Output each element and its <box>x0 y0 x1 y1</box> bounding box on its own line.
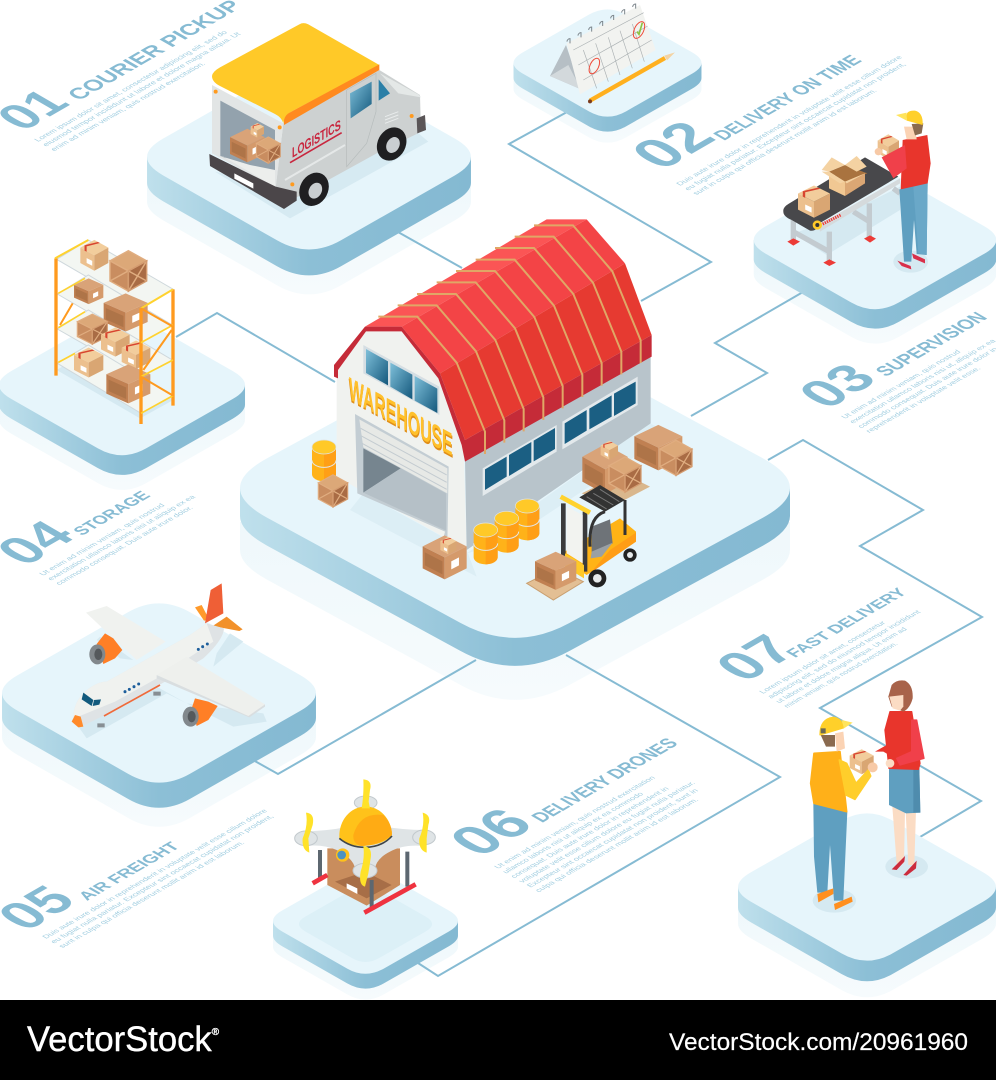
number 03: 03 <box>785 356 889 416</box>
roof <box>334 219 652 462</box>
paragraph: eu fugiat nulla pariatur. Excepteur sint occaecat cupidatat non proident, <box>48 813 276 945</box>
paragraph: Duis aute irure dolor in reprehenderit in voluptate velit esse cillum dolore <box>40 807 269 940</box>
platform <box>273 868 458 989</box>
paragraph: commodo consequat. Duis aute irure dolor in <box>855 346 996 429</box>
calendar <box>550 4 675 103</box>
footer logo: ® <box>212 1027 220 1038</box>
warehouse sign: WAREHOUSE <box>349 372 453 465</box>
paragraph: voluptate velit esse cillum dolore eu fugiat nulla pariatur. <box>516 780 697 884</box>
conveyor and worker <box>783 111 931 273</box>
paragraph: sunt in culpa qui officia deserunt mollit anim id est laborum. <box>56 839 247 949</box>
number 07: 07 <box>701 626 809 689</box>
crate by the door <box>318 475 348 507</box>
side windows left <box>483 425 557 496</box>
paragraph: ullamco laboris nisi ut aliquip ex ea commodo <box>500 791 646 875</box>
block 07 fast delivery <box>701 585 939 709</box>
paragraph: Lorem ipsum dolor sit amet, consectetur adipiscing elit, sed do <box>32 29 229 143</box>
logistics lettering: LOGISTICS <box>292 117 341 162</box>
paragraph: Excepteur sint occaecat cupidatat non proident, sunt in <box>524 787 700 889</box>
van <box>209 23 428 218</box>
heading: DELIVERY DRONES <box>527 735 683 826</box>
courier man <box>811 717 878 913</box>
paragraph: culpa qui officia deserunt mollit anim id est laborum. <box>533 796 701 894</box>
front wall <box>337 330 467 550</box>
paragraph: minim veniam, quis nostrud exercitation. <box>781 641 900 709</box>
pencil <box>588 52 675 103</box>
platform <box>514 9 701 132</box>
shelf rack <box>55 240 173 424</box>
rear wheel <box>293 167 334 211</box>
block 02 delivery on time <box>618 52 921 196</box>
paragraph: consequat. Duis aute irure dolor in reprehenderit in <box>508 785 671 879</box>
drone <box>295 779 435 913</box>
heading: AIR FREIGHT <box>74 839 185 903</box>
block 01 courier pickup <box>0 0 251 152</box>
fuselage <box>73 623 224 727</box>
side wall <box>465 357 651 550</box>
side windows right <box>562 377 638 449</box>
panel: courier pickup van <box>147 23 471 275</box>
crate with parcel <box>423 535 467 579</box>
platform <box>2 603 316 808</box>
panel: air freight plane <box>2 583 316 808</box>
near engine <box>183 698 218 727</box>
paragraph: exercitation ullamco laboris nisi ut aliquip ex ea <box>45 493 198 582</box>
panel: calendar <box>514 4 701 132</box>
paragraph: Ut enim ad minim veniam, quis nostrud exercitation <box>492 774 657 870</box>
central platform <box>240 338 790 666</box>
paragraph: Ut enim ad minim veniam, quis nostrud <box>839 348 963 420</box>
block 05 air freight <box>0 807 286 949</box>
platform <box>0 315 245 475</box>
warehouse building <box>334 219 670 577</box>
heading: DELIVERY ON TIME <box>709 52 867 144</box>
open carton <box>822 156 868 196</box>
panel: central warehouse <box>240 219 790 666</box>
forklift <box>527 485 637 600</box>
platform <box>147 65 471 275</box>
crate stack right <box>634 425 692 475</box>
paragraph <box>492 765 714 894</box>
plane <box>72 583 267 738</box>
upper windows <box>363 345 439 415</box>
block 06 delivery drones <box>436 735 714 894</box>
paragraph: eiusmod tempor incididunt ut labore et dolore magna aliqua. Ut <box>40 31 243 148</box>
crate stack on pallet <box>582 441 650 505</box>
panel: delivery drone <box>273 779 458 989</box>
panel: storage shelf <box>0 240 245 475</box>
connector lines <box>176 112 982 976</box>
paragraph: Lorem ipsum dolor sit amet, consectetur <box>757 619 888 695</box>
heading: FAST DELIVERY <box>782 585 912 660</box>
paragraph: Ut enim ad minim veniam, quis nostrud <box>37 502 167 577</box>
woman <box>875 680 928 879</box>
block 03 supervision <box>785 309 996 434</box>
warehouse sign front: WAREHOUSE <box>349 370 452 463</box>
footer bar <box>0 1000 996 1080</box>
worker <box>875 111 931 273</box>
platform <box>754 171 996 329</box>
paragraph: enim ad minim veniam, quis nostrud exercitation. <box>48 60 208 152</box>
paragraph: exercitation ullamco laboris nisi ut, aliquip ex ea <box>847 337 996 425</box>
heading: STORAGE <box>69 488 155 538</box>
paragraph: eu fugiat nulla pariatur. Excepteur sint occaecat cupidatat non proident, <box>682 61 908 192</box>
roller door <box>355 414 449 543</box>
number 06: 06 <box>436 800 547 865</box>
panel: fast delivery people <box>738 680 996 981</box>
barrels and boxes around warehouse <box>312 425 692 600</box>
paragraph: ut labore et dolore magna aliqua. Ut enim ad <box>773 626 909 704</box>
paragraph <box>37 489 206 586</box>
barrels by the door <box>312 440 336 481</box>
paragraph: Duis aute irure dolor in reprehenderit in voluptate velit esse cillum dolore <box>674 54 904 187</box>
block 04 storage <box>0 488 206 586</box>
far engine <box>89 633 122 664</box>
front wheel <box>371 122 412 166</box>
far wing <box>86 606 166 660</box>
paragraph: adipiscing elit, sed do eiusmod tempor incididunt <box>765 609 923 700</box>
tail <box>195 583 243 631</box>
barrels at side wall <box>474 499 539 564</box>
paragraph: sunt in culpa qui officia deserunt mollit anim id est laborum. <box>690 87 879 196</box>
footer logo: VectorStock <box>27 1020 214 1059</box>
near wing <box>157 675 265 717</box>
paragraph <box>757 604 939 709</box>
paragraph: reprehenderit in voluptate velit esse. <box>863 365 983 434</box>
number 02: 02 <box>618 113 729 178</box>
paragraph: commodo consequat. Duis aute irure dolor. <box>53 504 195 586</box>
panel: conveyor supervision <box>754 111 996 329</box>
platform <box>738 813 996 981</box>
footer url: VectorStock.com/20961960 <box>669 1029 968 1056</box>
